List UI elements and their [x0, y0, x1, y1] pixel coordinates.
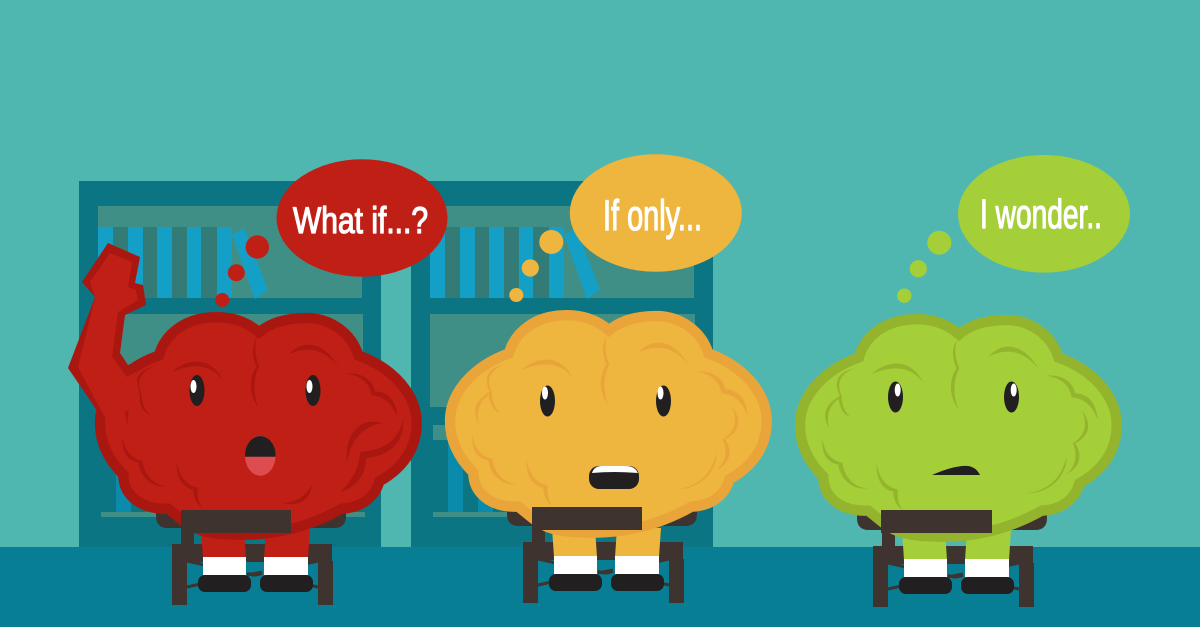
- right bookcase: [411, 181, 713, 548]
- red eyes: [190, 375, 320, 406]
- text: if only: If only...: [603, 192, 702, 240]
- red legs: [201, 530, 310, 558]
- red chair: [156, 512, 346, 605]
- orange thought bubble: [509, 154, 742, 302]
- red brain character: [68, 243, 417, 605]
- green socks and shoes: [899, 559, 1014, 594]
- text: what if: What if...?: [293, 200, 428, 241]
- green mouth: [932, 466, 980, 475]
- green brain right wrinkles: [1027, 411, 1088, 493]
- green brain body: [800, 319, 1117, 537]
- left bookcase: [79, 181, 381, 548]
- orange laptop: [532, 507, 642, 530]
- orange eyes: [540, 386, 671, 416]
- red arm fill: [78, 253, 140, 425]
- orange chair: [507, 510, 697, 603]
- red laptop: [181, 510, 291, 533]
- orange mouth: [589, 466, 639, 489]
- floor: [0, 547, 1200, 627]
- orange brain character: [450, 315, 767, 603]
- orange socks and shoes: [549, 556, 664, 591]
- orange legs: [552, 528, 661, 557]
- green thought bubble: [897, 155, 1130, 303]
- green eyes: [888, 382, 1019, 412]
- green brain character: [800, 319, 1117, 607]
- red thought bubble: [215, 159, 448, 307]
- red brain body: [100, 317, 417, 535]
- green legs: [902, 530, 1011, 560]
- green chair: [857, 514, 1047, 607]
- red arm outline: [68, 243, 180, 420]
- red mouth: [245, 436, 276, 476]
- red brain right wrinkles: [282, 420, 403, 504]
- orange brain right wrinkles: [677, 407, 738, 489]
- text: i wonder: I wonder..: [980, 191, 1102, 237]
- green laptop: [881, 510, 992, 533]
- orange brain body: [450, 315, 767, 533]
- red socks and shoes: [198, 557, 313, 592]
